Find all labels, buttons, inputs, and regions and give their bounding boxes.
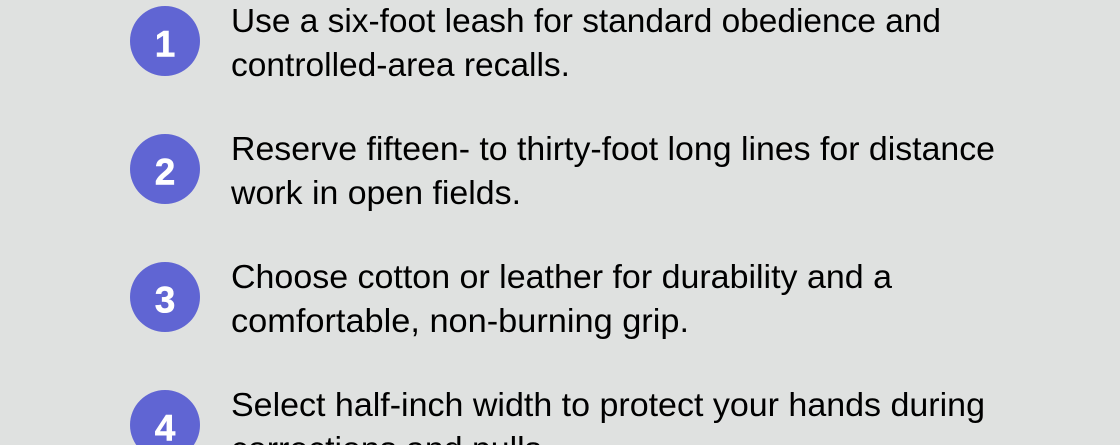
text: item 1: controlled-area recalls. <box>231 46 570 83</box>
list item 2 <box>130 130 995 211</box>
number badge 3 <box>130 262 200 332</box>
number badge 3: 3 <box>155 280 175 320</box>
number badge 4 <box>130 390 200 445</box>
number badge 2 <box>130 134 200 204</box>
text: item 3: comfortable, non-burning grip. <box>231 302 689 339</box>
text: item 3: Choose cotton or leather for durability and a <box>231 258 893 295</box>
text: item 1 <box>231 2 941 83</box>
text: item 4: Select half-inch width to protect your hands during <box>231 386 985 423</box>
list item 1 <box>130 2 941 83</box>
number badge 2: 2 <box>155 152 175 192</box>
text: item 3 <box>231 258 893 339</box>
text: item 1: Use a six-foot leash for standard obedience and <box>231 2 941 39</box>
number badge 1: 1 <box>155 24 175 64</box>
text: item 2 <box>230 130 995 211</box>
number badge 1 <box>130 6 200 76</box>
text: item 4 <box>231 386 985 445</box>
text: item 2: work in open fields. <box>230 174 521 211</box>
list item 3 <box>130 258 893 339</box>
list item 4 <box>130 386 985 445</box>
text: item 2: Reserve fifteen- to thirty-foot long lines for distance <box>231 130 995 167</box>
